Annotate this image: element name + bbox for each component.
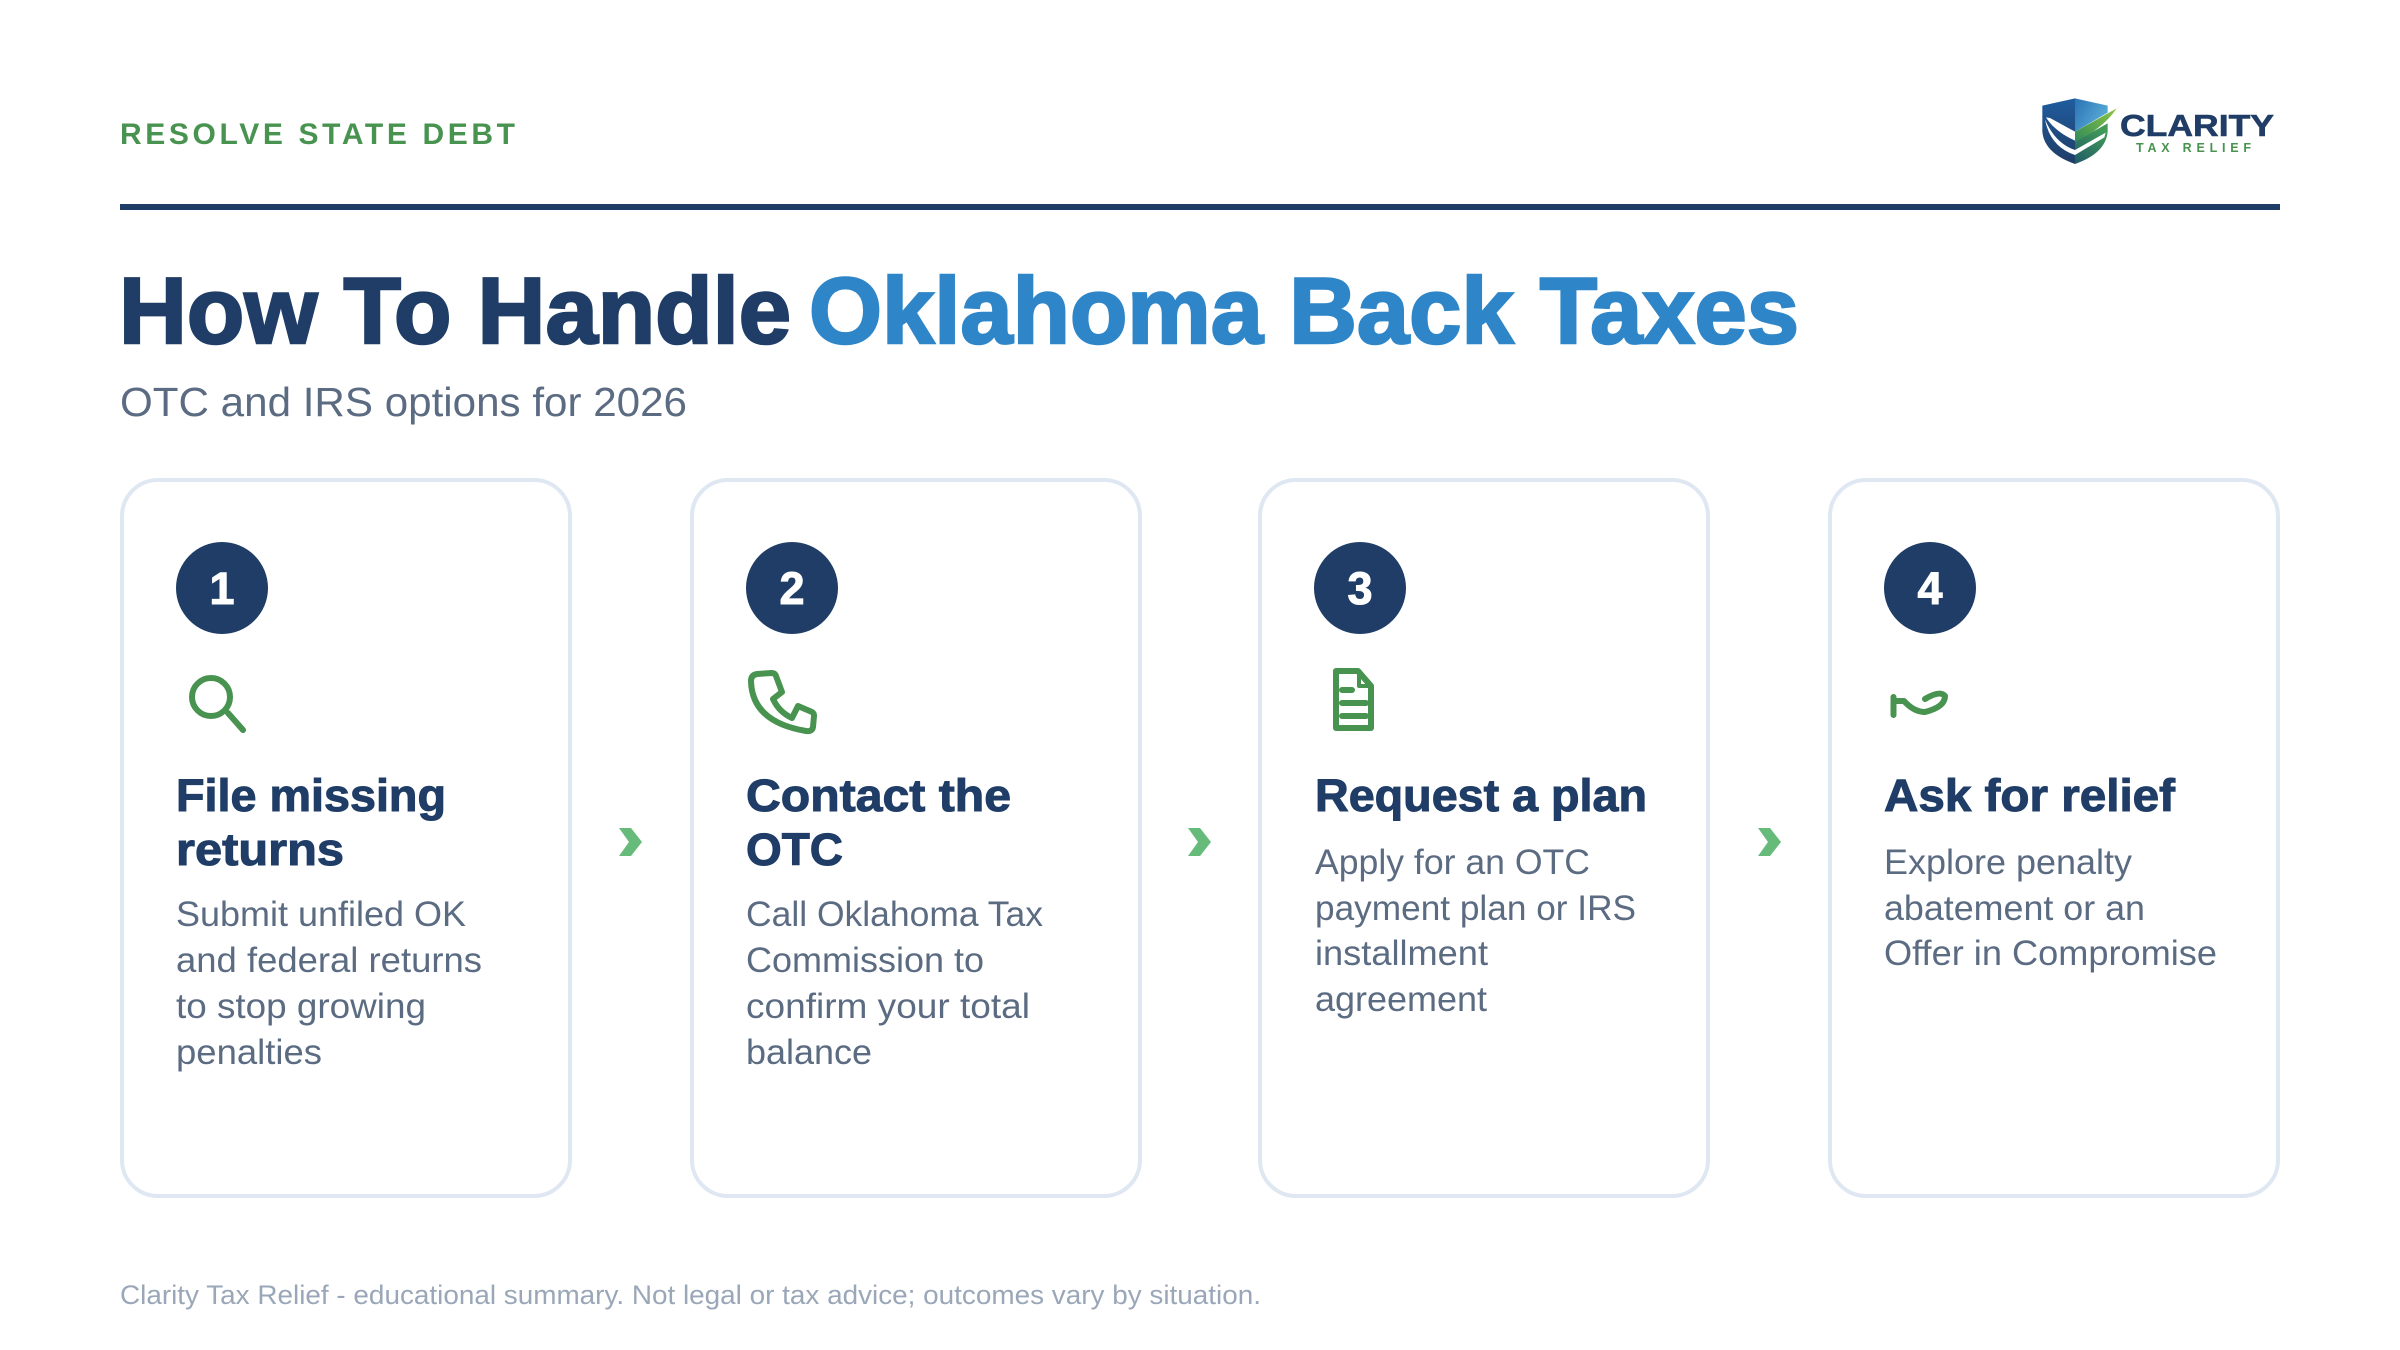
step number 4	[1884, 542, 1976, 634]
step 1 description: penalties	[176, 1033, 322, 1072]
subtitle: OTC and IRS options for 2026	[120, 379, 687, 425]
step 4 description	[1884, 843, 2217, 973]
step 2 heading: OTC	[746, 824, 843, 875]
eyebrow label: RESOLVE STATE DEBT	[120, 118, 515, 151]
step number 3: 3	[1347, 563, 1373, 614]
step 2 description: balance	[746, 1033, 872, 1072]
icon: magnifying glass	[192, 678, 243, 730]
step number 2	[746, 542, 838, 634]
step 1 heading: returns	[176, 824, 344, 875]
step number 1	[176, 542, 268, 634]
header rule	[120, 204, 2280, 210]
step 3 description: Apply for an OTC	[1315, 843, 1590, 882]
step 2 heading: Contact the	[746, 770, 1011, 821]
step 1 heading: File missing	[176, 770, 446, 821]
step 3 description: agreement	[1315, 980, 1487, 1019]
logo wordmark: CLARITY	[2120, 108, 2274, 143]
icon: handshake squiggle	[1894, 694, 1945, 715]
step 2 description	[746, 895, 1044, 1072]
logo: Clarity Tax Relief	[2042, 98, 2274, 164]
icon: phone	[751, 673, 814, 731]
icon: document	[1336, 671, 1371, 728]
step 1 description: and federal returns	[176, 941, 482, 980]
step 2 description: Commission to	[746, 941, 984, 980]
icon: shield with checkmark	[2042, 98, 2117, 164]
step 3 description: installment	[1315, 934, 1488, 973]
step 4 description: Explore penalty	[1884, 843, 2133, 882]
step 2 heading	[746, 770, 1011, 875]
step 4 description: Offer in Compromise	[1884, 934, 2217, 973]
step number 3	[1314, 542, 1406, 634]
arrow 1	[619, 828, 642, 856]
step 3 description: payment plan or IRS	[1315, 889, 1636, 928]
step number 1: 1	[209, 563, 235, 614]
step 3 description	[1315, 843, 1636, 1019]
panel: step 3	[1260, 480, 1708, 1196]
step 4 heading: Ask for relief	[1884, 770, 2176, 821]
footer disclaimer: Clarity Tax Relief - educational summary. Not legal or tax advice; outcomes vary by situation.	[120, 1280, 1261, 1310]
logo tagline: TAX RELIEF	[2136, 141, 2251, 155]
step 4 description: abatement or an	[1884, 889, 2145, 928]
title: How To Handle	[119, 258, 791, 363]
step 2 description: confirm your total	[746, 987, 1030, 1026]
step 2 description: Call Oklahoma Tax	[746, 895, 1044, 934]
arrow 3	[1758, 828, 1781, 856]
step number 2: 2	[779, 563, 805, 614]
arrow 2	[1188, 828, 1211, 856]
step number 4: 4	[1917, 563, 1943, 614]
step 1 description	[176, 895, 482, 1072]
panel: step 4	[1830, 480, 2278, 1196]
title	[119, 258, 1799, 363]
step 1 description: to stop growing	[176, 987, 426, 1026]
title: Oklahoma Back Taxes	[809, 258, 1799, 363]
step 1 heading	[176, 770, 446, 875]
step 1 description: Submit unfiled OK	[176, 895, 466, 934]
panel: step 2	[692, 480, 1140, 1196]
panel: step 1	[122, 480, 570, 1196]
step 3 heading: Request a plan	[1315, 770, 1647, 821]
